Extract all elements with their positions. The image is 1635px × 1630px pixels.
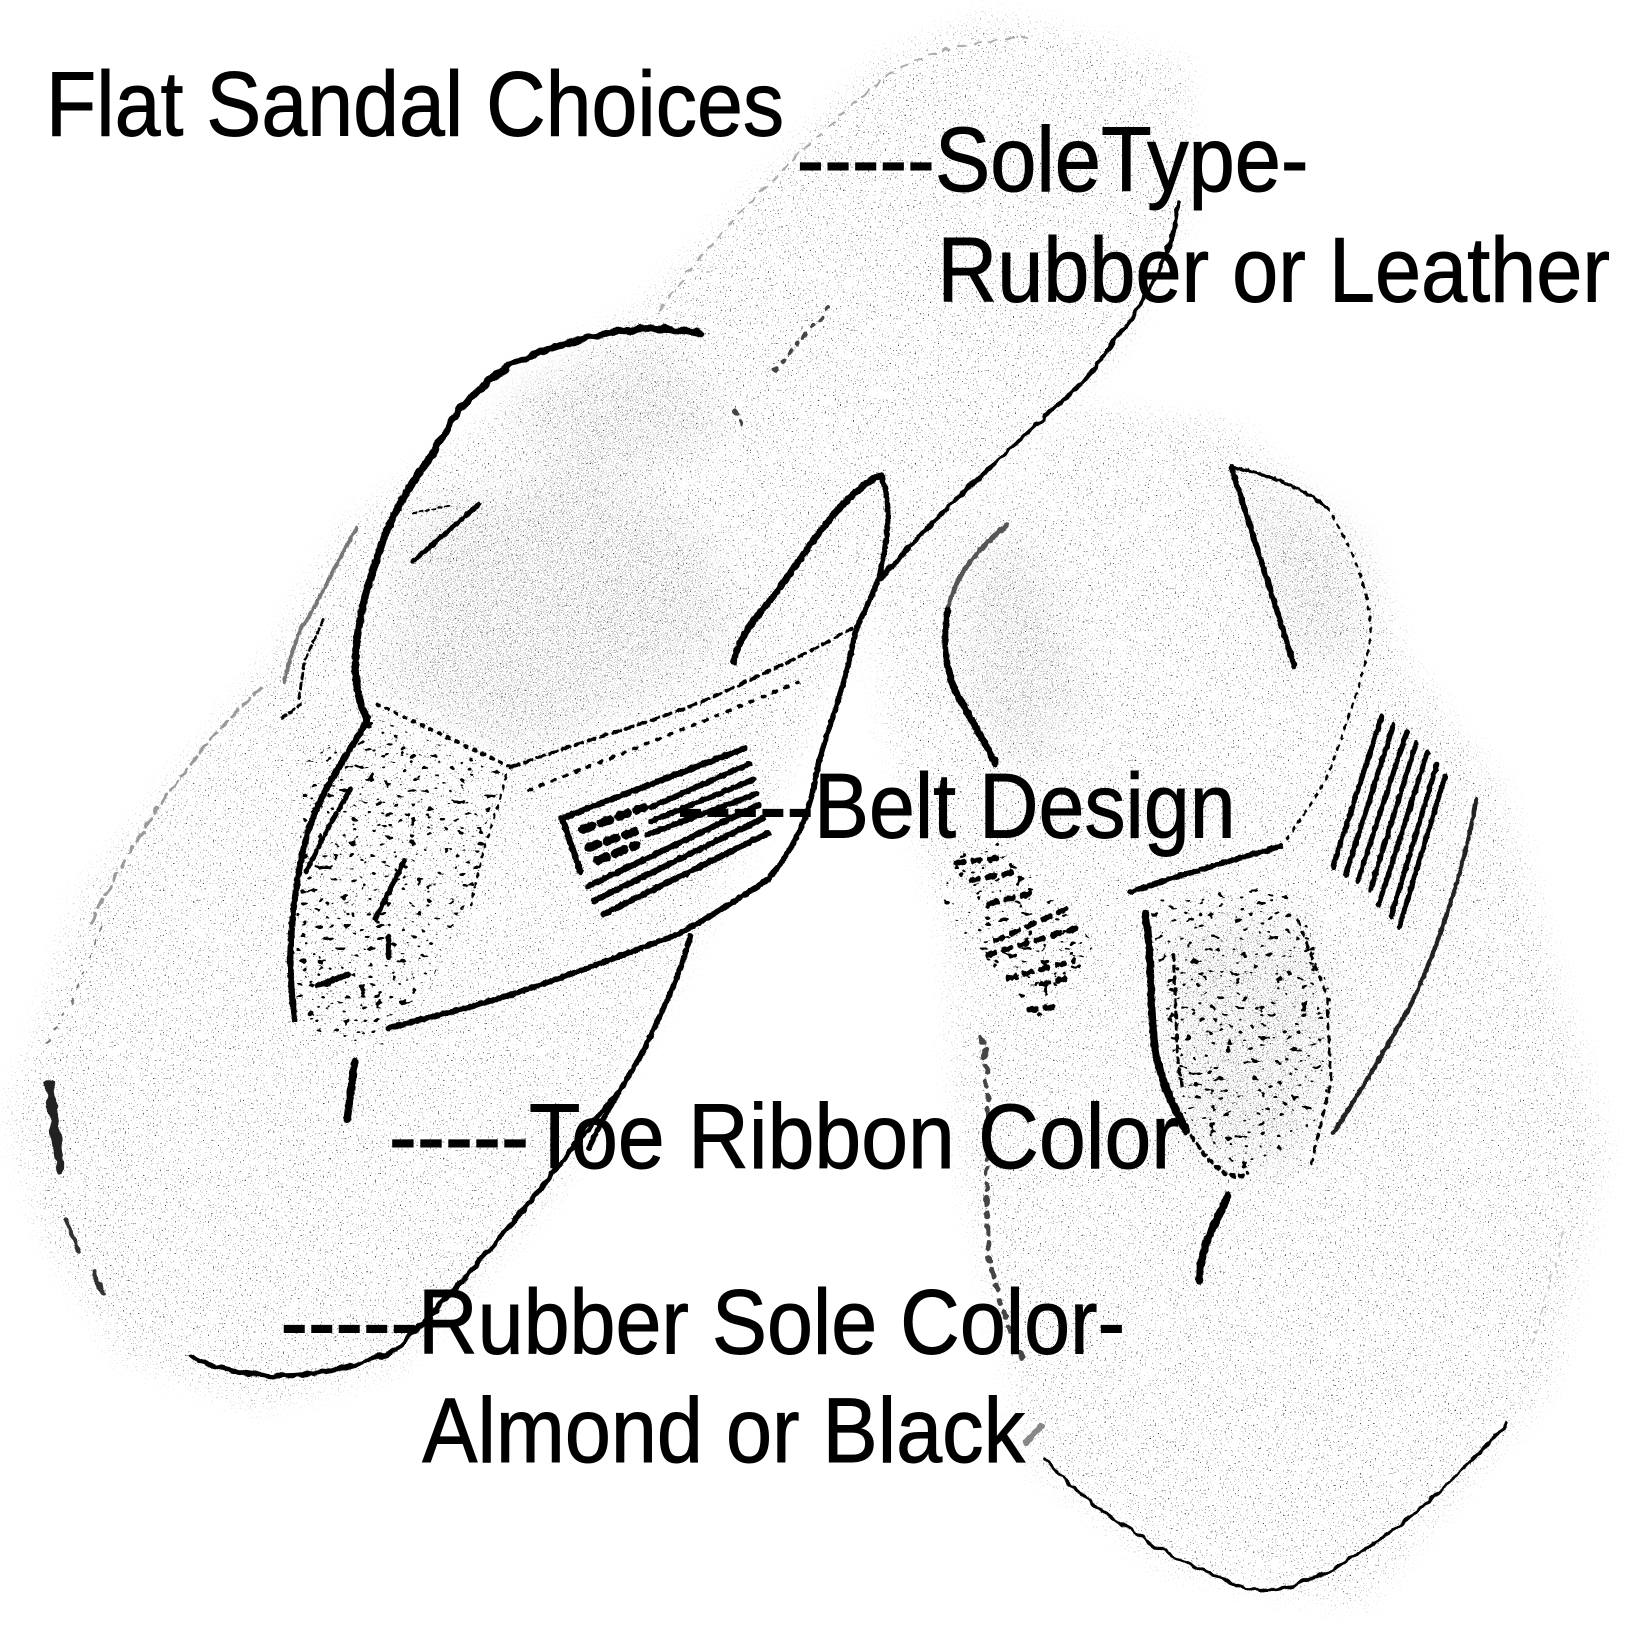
left sandal <box>10 16 1189 1408</box>
callout: rubber sole color <box>280 1271 1125 1482</box>
callout: toe ribbon color: -----Toe Ribbon Color <box>389 1086 1179 1188</box>
right heel cup grey patches <box>970 480 1366 1168</box>
right strap speckles <box>941 840 1331 1179</box>
left strap and toe loop outline <box>282 450 929 1149</box>
right sandal <box>876 407 1606 1606</box>
callout: sole type <box>797 109 1610 321</box>
left sole speckle texture <box>10 16 1189 1408</box>
right straps and stripes outline <box>945 467 1476 1279</box>
callout: rubber sole color: -----Rubber Sole Color- <box>280 1271 1125 1373</box>
right flag stripes <box>1333 717 1445 926</box>
right sole speckle texture <box>876 407 1606 1606</box>
callout: rubber sole color: Almond or Black <box>422 1380 1026 1482</box>
left strap speckles <box>297 718 504 1048</box>
callout: belt design: -----Belt Design <box>677 755 1236 857</box>
left flag stars <box>583 807 645 861</box>
left sole outline strokes <box>47 38 1178 1376</box>
title: Flat Sandal Choices <box>46 54 784 156</box>
right sole outline strokes <box>982 1037 1564 1590</box>
callout: sole type: -----SoleType- <box>797 109 1309 211</box>
left flag emblem <box>562 748 768 914</box>
left heel cup grey patches <box>386 344 730 751</box>
right flag stars <box>956 858 1082 1010</box>
